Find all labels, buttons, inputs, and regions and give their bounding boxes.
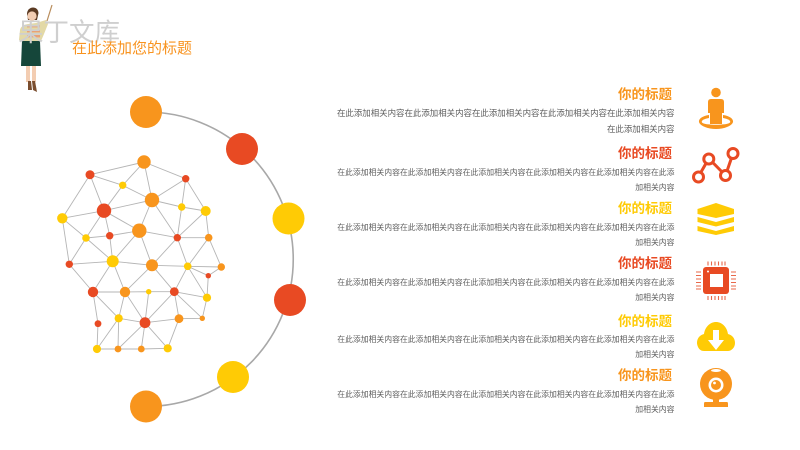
item 6 text: 在此添加相关内容在此添加相关内容在此添加相关内容在此添加相关内容在此添加相关内容在此添 xyxy=(337,390,674,399)
item 5 heading: 你的标题 xyxy=(618,314,672,329)
item 5 text xyxy=(337,335,674,359)
item 1 text: 在此添加相关内容在此添加相关内容在此添加相关内容在此添加相关内容在此添加相关内容 xyxy=(337,108,674,118)
item 6 text xyxy=(337,390,674,414)
item 3 heading: 你的标题 xyxy=(618,201,672,216)
item 2 heading: 你的标题 xyxy=(618,146,672,161)
icon: person on ring xyxy=(699,88,733,129)
item 5 text: 加相关内容 xyxy=(635,350,674,359)
item 3 text: 加相关内容 xyxy=(635,238,674,247)
item 4 text: 加相关内容 xyxy=(635,293,674,302)
icon: webcam xyxy=(700,368,732,407)
item 4 heading: 你的标题 xyxy=(618,256,672,271)
item 6 heading: 你的标题 xyxy=(618,368,672,383)
item 1 text: 在此添加相关内容 xyxy=(607,124,674,134)
item 2 text: 在此添加相关内容在此添加相关内容在此添加相关内容在此添加相关内容在此添加相关内容在此添 xyxy=(337,168,674,177)
item 2 text xyxy=(337,168,674,192)
item 1 text xyxy=(337,108,674,134)
icon: chip xyxy=(696,262,736,300)
icon: line chart nodes xyxy=(694,148,738,182)
icon: stacked layers xyxy=(698,203,734,235)
watermark: 果丁文库 xyxy=(18,19,120,47)
item 3 text xyxy=(337,223,674,247)
icon: cloud download xyxy=(697,322,735,351)
title: 在此添加您的标题 xyxy=(72,40,192,57)
item 3 text: 在此添加相关内容在此添加相关内容在此添加相关内容在此添加相关内容在此添加相关内容在此添 xyxy=(337,223,674,232)
item 2 text: 加相关内容 xyxy=(635,183,674,192)
item 1 heading: 你的标题 xyxy=(618,87,672,102)
item 5 text: 在此添加相关内容在此添加相关内容在此添加相关内容在此添加相关内容在此添加相关内容在此添 xyxy=(337,335,674,344)
item 4 text xyxy=(337,278,674,302)
item 6 text: 加相关内容 xyxy=(635,405,674,414)
item 4 text: 在此添加相关内容在此添加相关内容在此添加相关内容在此添加相关内容在此添加相关内容在此添 xyxy=(337,278,674,287)
